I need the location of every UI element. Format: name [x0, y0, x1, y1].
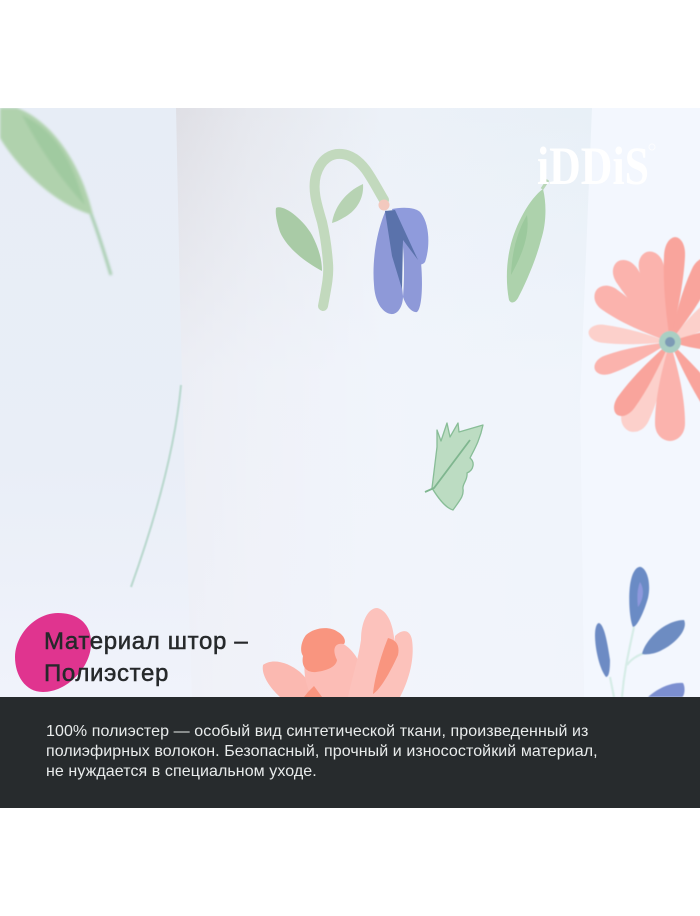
body text: 100% полиэстер — особый вид синтетической ткани, произведенный из	[46, 723, 588, 740]
pink accent blob	[15, 613, 91, 692]
body text: полиэфирных волокон. Безопасный, прочный и износостойкий материал,	[46, 743, 598, 760]
small notched green leaf	[425, 423, 483, 510]
left leaf	[0, 108, 111, 275]
pink daisy	[588, 237, 700, 441]
title: Материал штор –	[44, 628, 248, 655]
curtain folds background	[0, 108, 700, 697]
body text: не нуждается в специальном уходе.	[46, 763, 317, 780]
title	[44, 628, 248, 687]
body text	[46, 723, 598, 780]
salmon flower	[263, 608, 413, 697]
thin stem	[131, 385, 181, 587]
photo: curtain with floral print	[0, 108, 700, 697]
blue sprig	[595, 567, 685, 697]
logo: IDDIS: iDDiS	[537, 136, 649, 196]
title: Полиэстер	[44, 660, 169, 687]
green leaf	[507, 180, 548, 302]
blue bell flower with stem	[276, 154, 428, 314]
dark text band	[0, 697, 700, 808]
